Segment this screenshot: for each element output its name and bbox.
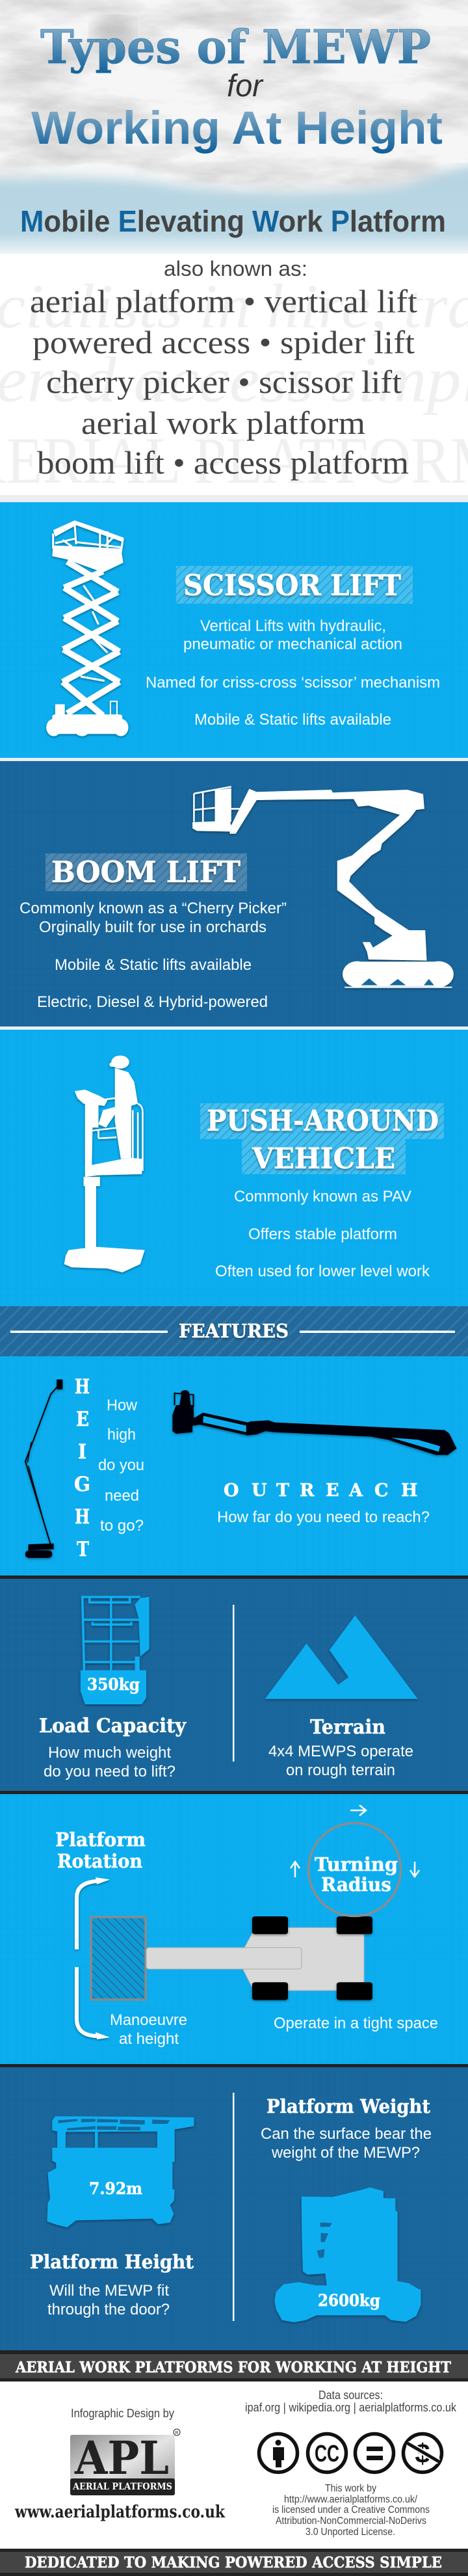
text: outreach question: How far do you need to reach? xyxy=(217,1509,430,1526)
text: operate in a tight space: Operate in a tight space xyxy=(274,2015,438,2032)
header background: cloud and sky xyxy=(0,0,468,254)
text: load capacity question: How much weight xyxy=(48,1744,171,1762)
text: license: Attribution-NonCommercial-NoDerivs xyxy=(276,2516,426,2527)
text: how high question xyxy=(98,1397,144,1535)
icon: boom lift rear silhouette xyxy=(274,2188,421,2322)
text: platform height question: Will the MEWP fit xyxy=(49,2282,169,2300)
panel: platform rotation and turning radius xyxy=(0,1794,468,2067)
text: license: This work by xyxy=(325,2483,376,2494)
heading: platform rotation: Platform xyxy=(55,1829,146,1851)
also known as list: cherry picker • scissor lift xyxy=(46,364,402,400)
text: how high question: How xyxy=(107,1397,138,1414)
heading: turning radius: Turning xyxy=(315,1853,398,1875)
text: scissor lift description: pneumatic or mechanical action xyxy=(183,636,402,653)
heading: height letters: H xyxy=(75,1375,90,1399)
text: boom lift description: Mobile & Static lifts available xyxy=(55,956,252,974)
text: terrain description: on rough terrain xyxy=(286,1762,395,1779)
features banner xyxy=(0,1306,468,1356)
title: for xyxy=(227,69,264,103)
logo: APL aerial platforms: R xyxy=(175,2431,179,2435)
panel: scissor lift xyxy=(0,502,468,761)
heading: platform rotation xyxy=(55,1829,146,1872)
text: terrain description: 4x4 MEWPS operate xyxy=(268,1743,413,1760)
heading: height letters: H xyxy=(75,1505,90,1529)
heading: boom lift: BOOM LIFT xyxy=(51,855,240,889)
heading: push-around vehicle xyxy=(200,1103,444,1175)
logo: APL aerial platforms: AERIAL PLATFORMS xyxy=(72,2482,172,2492)
icon: scissor lift front silhouette xyxy=(47,2116,194,2227)
heading: height letters: G xyxy=(74,1473,90,1496)
text: website: www.aerialplatforms.co.uk xyxy=(14,2502,226,2522)
icon: scissor lift silhouette xyxy=(46,520,128,736)
text: push-around vehicle description: Offers stable platform xyxy=(248,1226,397,1243)
text: load capacity question xyxy=(44,1744,176,1780)
heading: load capacity: Load Capacity xyxy=(39,1715,187,1737)
heading: push-around vehicle: PUSH-AROUND xyxy=(207,1105,439,1138)
text: scissor lift description: Vertical Lifts with hydraulic, xyxy=(200,617,386,635)
heading: platform height: Platform Height xyxy=(30,2251,194,2273)
label: 2600kg: 2600kg xyxy=(318,2291,380,2310)
title xyxy=(31,20,443,154)
text: manoeuvre at height xyxy=(110,2011,187,2048)
heading: height letters xyxy=(74,1375,90,1561)
heading: height letters: I xyxy=(78,1440,86,1464)
icon: platform cage xyxy=(81,1597,150,1704)
banner: dedicated to making powered access simple: DEDICATED TO MAKING POWERED ACCESS SIMPLE xyxy=(25,2554,442,2571)
text: platform weight question xyxy=(261,2125,432,2162)
text: push-around vehicle description: Often used for lower level work xyxy=(215,1263,430,1280)
panel: boom lift xyxy=(0,761,468,1030)
title: Working At Height xyxy=(31,103,443,154)
text: boom lift description: Orginally built for use in orchards xyxy=(39,919,266,936)
arrows: turning direction xyxy=(291,1805,419,1877)
text: terrain description xyxy=(268,1743,413,1779)
icon: creative commons badges: CC xyxy=(315,2440,339,2467)
title: Types of MEWP xyxy=(40,20,431,74)
label: 7.92m: 7.92m xyxy=(89,2179,142,2198)
arrow: rotation curved arrows xyxy=(77,1877,110,2039)
text: scissor lift description xyxy=(146,617,440,729)
text: how high question: do you xyxy=(98,1456,144,1474)
text: platform weight question: Can the surface bear the xyxy=(261,2125,432,2143)
panel: credits xyxy=(0,2381,468,2549)
panel: platform height and weight xyxy=(0,2067,468,2350)
heading: turning radius: Radius xyxy=(321,1873,391,1896)
banner: dedicated to making powered access simple xyxy=(0,2549,468,2576)
icon: tall boom silhouette xyxy=(25,1380,62,1558)
text: design credit: Infographic Design by xyxy=(71,2407,174,2420)
text: boom lift description xyxy=(20,900,287,1011)
icon: push-around vehicle silhouette xyxy=(64,1056,145,1272)
text: how high question: need xyxy=(105,1487,139,1505)
text: data sources xyxy=(245,2389,457,2414)
icon: mountains xyxy=(265,1615,418,1699)
banner: aerial work platforms xyxy=(0,2350,468,2381)
heading: height letters: E xyxy=(76,1408,89,1431)
watermark text: ered access simpl xyxy=(0,343,468,416)
text: data sources: Data sources: xyxy=(318,2389,383,2402)
text: platform weight question: weight of the MEWP? xyxy=(271,2144,420,2162)
text: push-around vehicle description xyxy=(215,1188,430,1280)
text: license: 3.0 Unported License. xyxy=(306,2527,395,2538)
heading: outreach: OUTREACH xyxy=(224,1481,418,1501)
text: license: http://www.aerialplatforms.co.uk/ xyxy=(284,2494,418,2505)
also known as list: aerial work platform xyxy=(81,405,365,441)
features banner: FEATURES xyxy=(179,1320,289,1342)
diagram: machine top view xyxy=(91,1823,400,2000)
watermark text xyxy=(0,284,468,483)
panel: load capacity and terrain xyxy=(0,1576,468,1794)
also known as list: also known as: xyxy=(164,257,307,280)
text: manoeuvre at height: Manoeuvre xyxy=(110,2011,187,2029)
heading: height letters: T xyxy=(77,1538,89,1561)
subtitle: Mobile Elevating Work Platform: Mobile Elevating Work Platform xyxy=(20,204,446,238)
text: manoeuvre at height: at height xyxy=(119,2030,179,2048)
heading: turning radius xyxy=(315,1853,398,1896)
icon: boom lift silhouette xyxy=(192,786,454,988)
panel: height and outreach xyxy=(0,1356,468,1576)
heading: push-around vehicle: VEHICLE xyxy=(252,1142,395,1175)
also known as list xyxy=(30,257,417,481)
text: load capacity question: do you need to lift? xyxy=(44,1763,176,1780)
icon: creative commons badges xyxy=(259,2434,442,2472)
heading: platform weight: Platform Weight xyxy=(266,2095,431,2117)
text: scissor lift description: Mobile & Static lifts available xyxy=(194,711,391,729)
text: how high question: high xyxy=(107,1426,136,1443)
text: license: is licensed under a Creative Commons xyxy=(272,2504,430,2516)
text: license xyxy=(272,2483,430,2538)
panel: push-around vehicle xyxy=(0,1030,468,1306)
text: boom lift description: Electric, Diesel & Hybrid-powered xyxy=(37,993,268,1011)
text: platform height question: through the door? xyxy=(47,2301,170,2318)
text: push-around vehicle description: Commonly known as PAV xyxy=(234,1188,411,1205)
label: 350kg: 350kg xyxy=(87,1675,140,1694)
text: scissor lift description: Named for criss-cross ‘scissor’ mechanism xyxy=(146,674,440,691)
also known as list: aerial platform • vertical lift xyxy=(30,283,417,319)
icon: creative commons badges: $ xyxy=(415,2438,430,2469)
icon: outreach boom silhouette xyxy=(172,1390,456,1455)
watermark text: cialists in hire, tra xyxy=(0,271,468,341)
text: platform height question xyxy=(47,2282,170,2318)
also known as list: boom lift • access platform xyxy=(37,444,409,481)
text: boom lift description: Commonly known as a “Cherry Picker” xyxy=(20,900,287,917)
heading: scissor lift: SCISSOR LIFT xyxy=(183,569,401,602)
logo: APL aerial platforms: APL xyxy=(74,2431,169,2485)
heading: terrain: Terrain xyxy=(310,1716,385,1739)
also known as list: powered access • spider lift xyxy=(32,324,415,360)
text: how high question: to go? xyxy=(100,1517,144,1535)
heading: platform rotation: Rotation xyxy=(57,1850,142,1872)
